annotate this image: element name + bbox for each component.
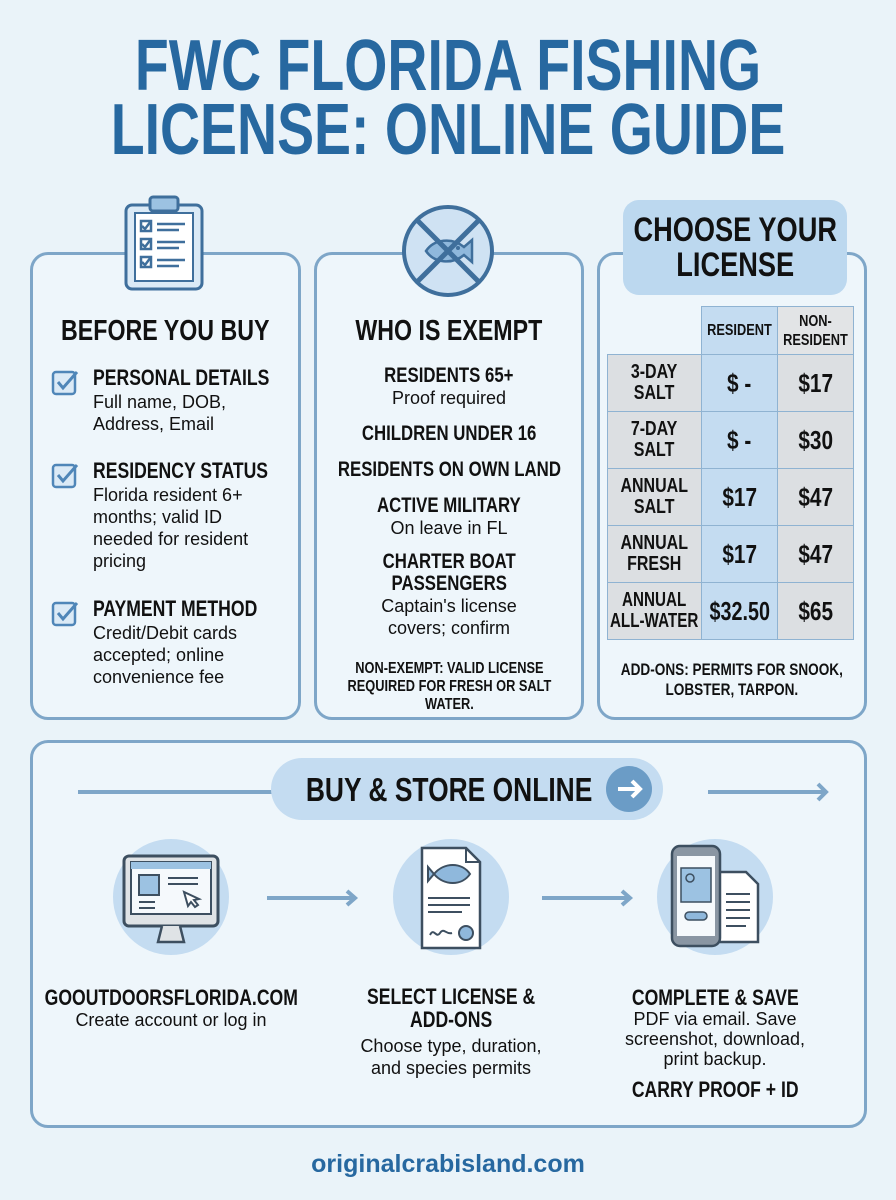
item: residency status: [52, 458, 268, 571]
heading: choose your license: [623, 200, 847, 295]
pricing table: $17: [722, 538, 757, 568]
note: non-exempt: REQUIRED FOR FRESH OR SALT: [347, 678, 551, 695]
panel: before you buy: PERSONAL DETAILS: [93, 365, 269, 390]
step 1: website: Create account or log in: [75, 1010, 267, 1030]
panel: before you buy: Full name, DOB,: [93, 392, 226, 412]
pricing table: RESIDENT: [783, 332, 848, 348]
title: LICENSE: ONLINE GUIDE: [111, 90, 785, 170]
exemption list: RESIDENTS 65+: [384, 364, 514, 387]
step 2: select license: and species permits: [371, 1058, 531, 1078]
exemption list: PASSENGERS: [391, 572, 507, 595]
exemption list: Captain's license: [381, 596, 517, 616]
step 3: complete & save: CARRY PROOF + ID: [632, 1077, 798, 1102]
step 3: complete & save: PDF via email. Save: [633, 1009, 797, 1029]
panel: before you buy: PAYMENT METHOD: [93, 596, 257, 621]
panel: choose your license: [597, 252, 867, 720]
exemption list: ACTIVE MILITARY: [377, 494, 521, 517]
step 3: complete & save: COMPLETE & SAVE: [632, 985, 798, 1010]
arrow: step 2 to 3: [542, 890, 633, 906]
note: add-ons: ADD-ONS: PERMITS FOR SNOOK,: [621, 660, 843, 679]
exemption list: CHILDREN UNDER 16: [362, 422, 536, 445]
step 3: complete & save: [625, 839, 805, 1102]
pricing table: NON-: [799, 312, 832, 330]
pricing table: 7-DAY: [631, 418, 678, 440]
pricing table: [607, 306, 854, 640]
pricing table: $65: [798, 596, 833, 626]
panel: who is exempt: [314, 252, 584, 720]
panel: before you buy: [30, 252, 301, 720]
pricing table: SALT: [634, 496, 675, 518]
icon: phone and document: [657, 839, 773, 955]
step 2: select license: SELECT LICENSE &: [367, 984, 535, 1009]
pricing table: $32.50: [709, 596, 770, 626]
item: payment method: [52, 596, 257, 687]
pricing table: $17: [798, 368, 833, 398]
title: [111, 26, 785, 170]
exemption list: [337, 364, 561, 638]
pricing table: RESIDENT: [707, 322, 772, 338]
exemption list: covers; confirm: [388, 618, 510, 638]
exemption list: RESIDENTS ON OWN LAND: [337, 458, 561, 481]
pricing table: $30: [798, 424, 833, 454]
pricing table: ANNUAL: [622, 589, 687, 611]
exemption list: Proof required: [392, 388, 506, 408]
pricing table: ANNUAL: [621, 475, 688, 497]
note: add-ons: LOBSTER, TARPON.: [666, 680, 798, 699]
icon: clipboard: [124, 196, 204, 290]
banner: buy & store online: [271, 758, 663, 820]
title: FWC FLORIDA FISHING: [135, 26, 761, 106]
arrow: step 1 to 2: [267, 890, 358, 906]
pricing table: SALT: [634, 439, 675, 461]
step 2: select license: [360, 839, 542, 1078]
panel: before you buy: Credit/Debit cards accepted; online convenience fee: [93, 623, 237, 687]
pricing table: $ -: [727, 368, 752, 398]
pricing table: ALL-WATER: [610, 610, 699, 632]
pricing table: $47: [798, 482, 833, 512]
step 1: website: [44, 839, 298, 1030]
note: non-exempt: [347, 660, 552, 713]
item: personal details: [52, 365, 269, 434]
panel: before you buy: Address, Email: [93, 414, 214, 434]
footer: website: originalcrabisland.com: [311, 1150, 585, 1178]
pricing table: $17: [722, 482, 757, 512]
heading: who is exempt: WHO IS EXEMPT: [356, 315, 542, 347]
panel: before you buy: RESIDENCY STATUS: [93, 458, 268, 483]
step 3: complete & save: print backup.: [663, 1049, 767, 1069]
note: non-exempt: NON-EXEMPT: VALID LICENSE: [355, 660, 543, 677]
pricing table: SALT: [634, 382, 675, 404]
exemption list: CHARTER BOAT: [382, 550, 516, 573]
step 2: select license: ADD-ONS: [410, 1007, 492, 1032]
heading: choose your license: CHOOSE YOUR: [633, 211, 837, 249]
panel: buy & store online: [30, 740, 867, 1128]
pricing table: $ -: [727, 424, 752, 454]
pricing table: FRESH: [627, 553, 682, 575]
heading: before you buy: BEFORE YOU BUY: [61, 315, 270, 347]
icon: computer: [113, 839, 229, 955]
heading: choose your license: LICENSE: [676, 246, 794, 284]
icon: no fish: [402, 205, 494, 297]
arrow: banner line: [78, 782, 829, 802]
pricing table: $47: [798, 538, 833, 568]
pricing table: ANNUAL: [621, 532, 688, 554]
step 2: select license: Choose type, duration,: [360, 1036, 542, 1056]
pricing table: 3-DAY: [631, 361, 678, 383]
note: add-ons: [621, 660, 843, 699]
banner: buy & store online: BUY & STORE ONLINE: [306, 771, 592, 808]
icon: license document: [393, 839, 509, 955]
step 3: complete & save: screenshot, download,: [625, 1029, 805, 1049]
step 1: website: GOOUTDOORSFLORIDA.COM: [44, 985, 298, 1010]
panel: before you buy: Florida resident 6+ months; valid ID needed for resident pricing: [93, 485, 248, 571]
exemption list: On leave in FL: [390, 518, 508, 538]
note: non-exempt: WATER.: [425, 696, 473, 713]
